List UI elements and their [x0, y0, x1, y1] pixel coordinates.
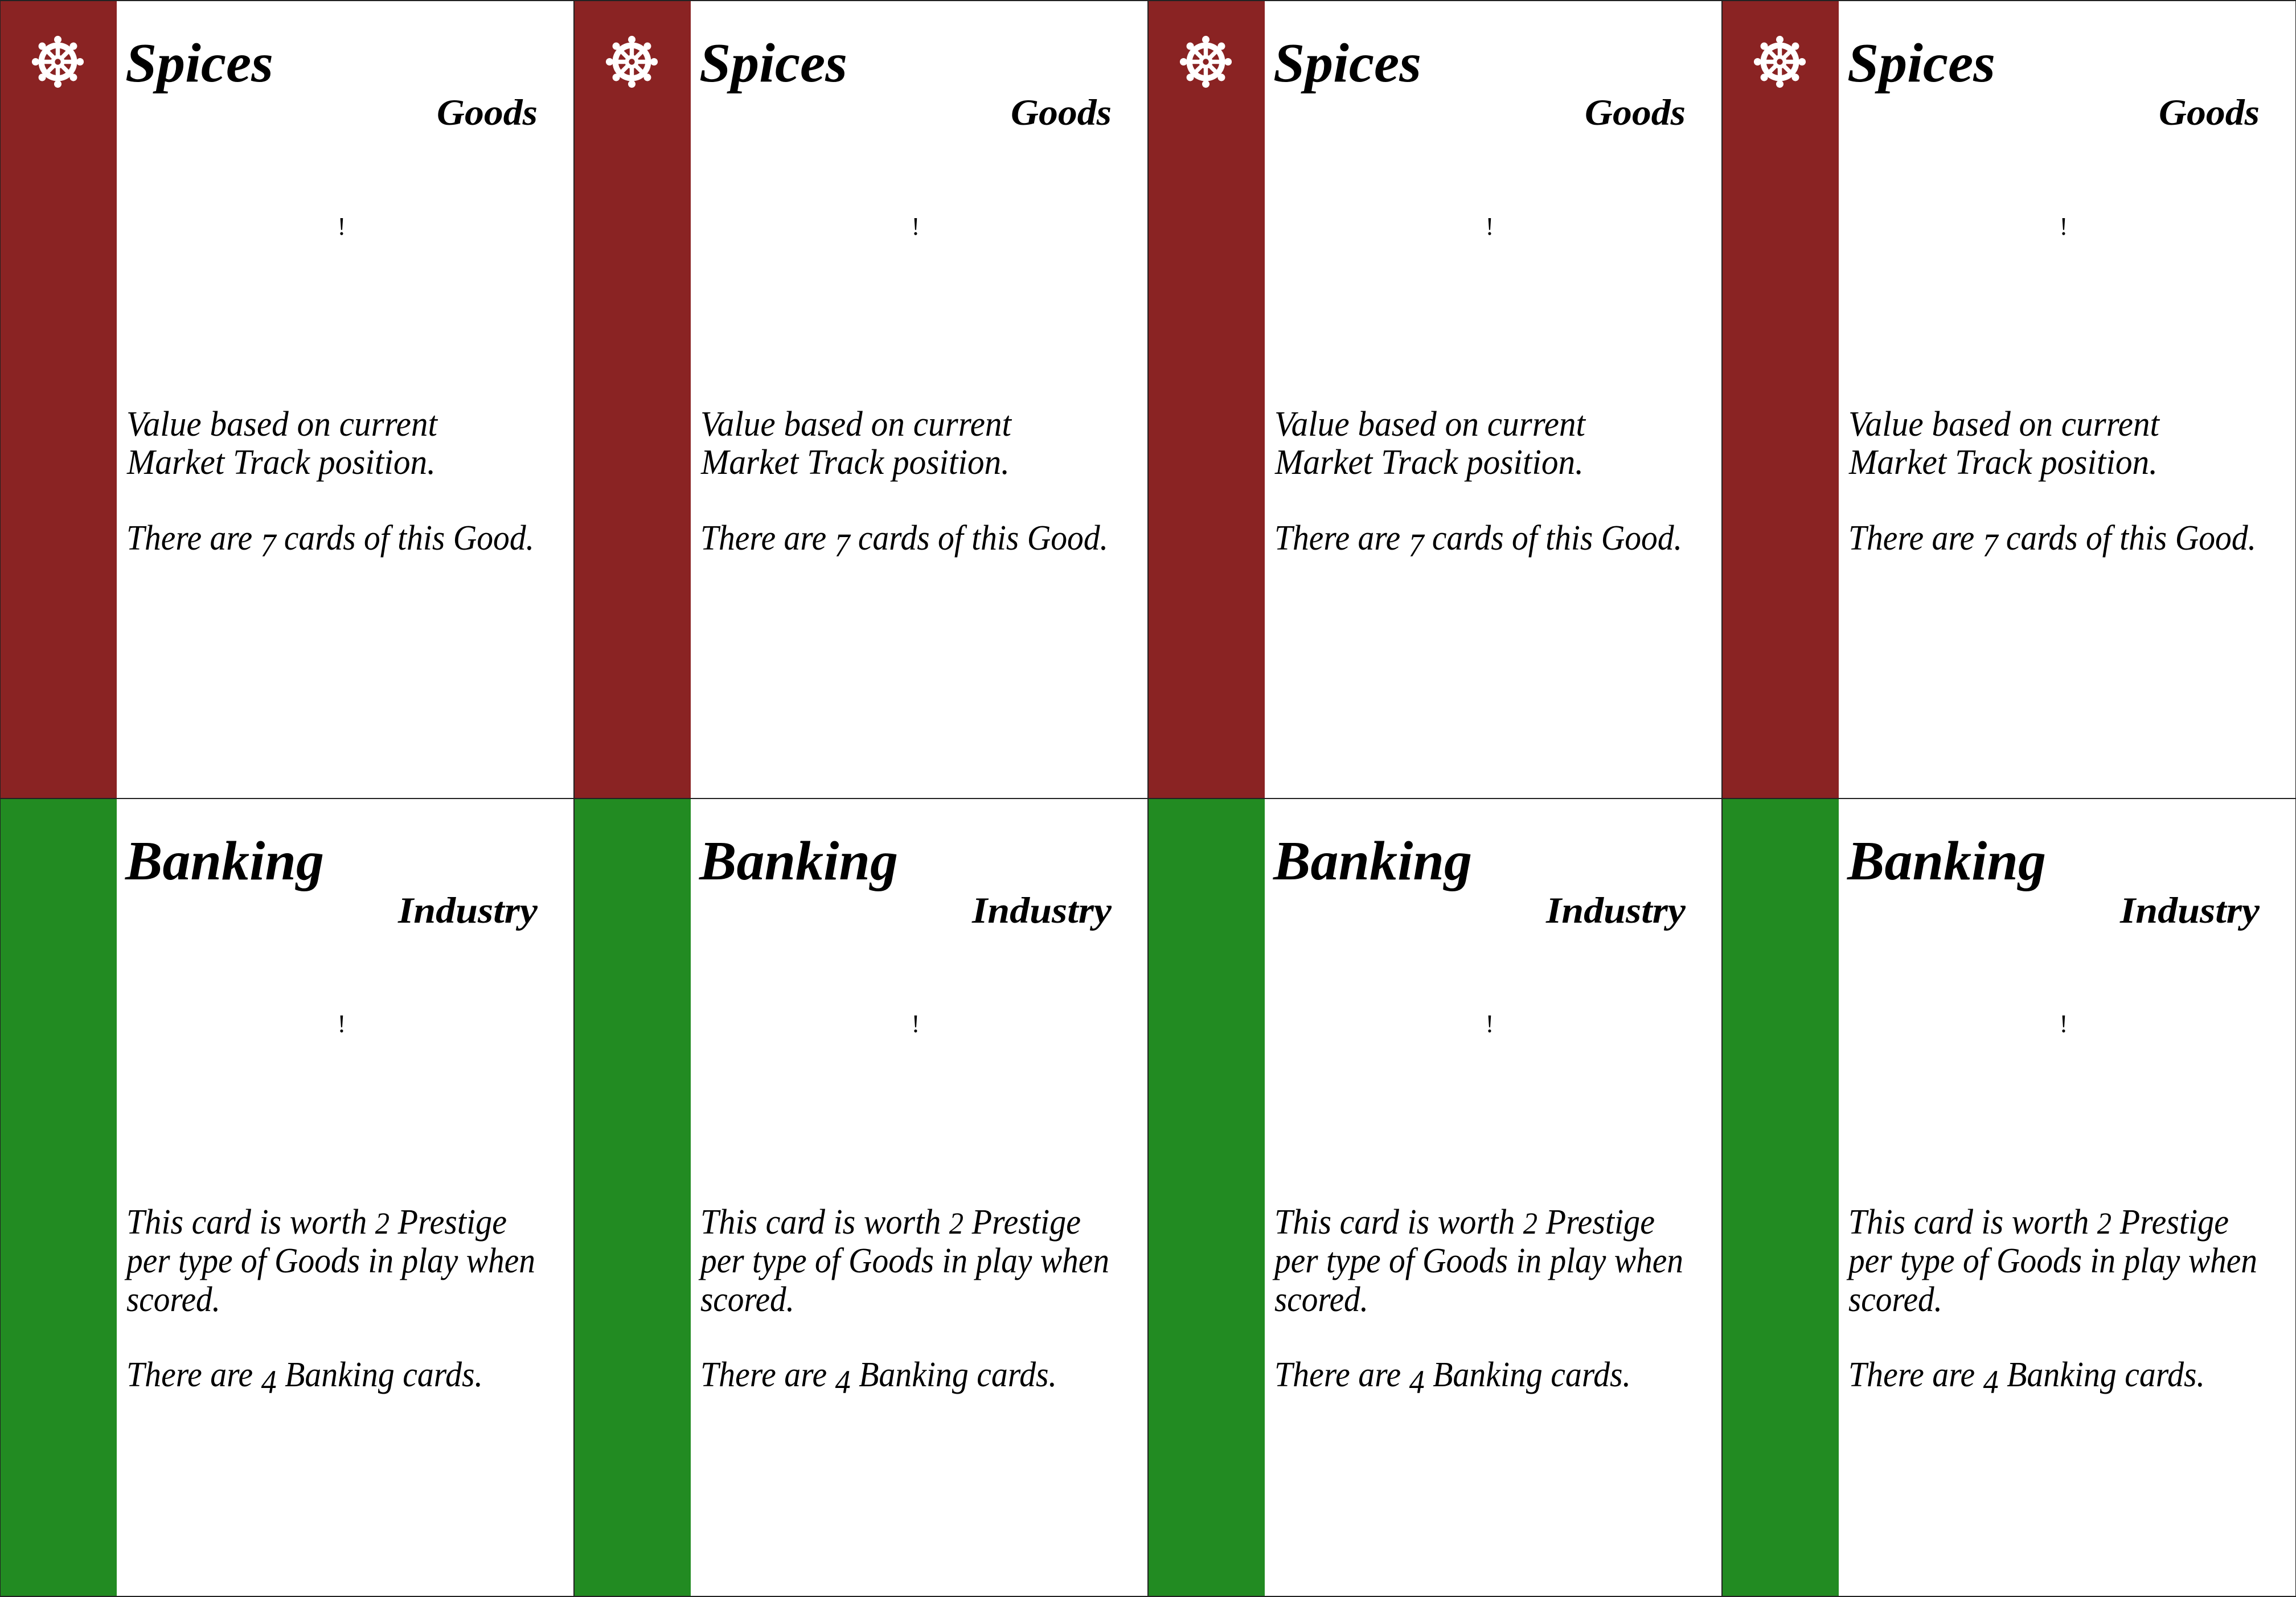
card text — [124, 1203, 535, 1401]
card text: There are — [126, 519, 262, 558]
card text: Value based on current — [1848, 405, 2160, 444]
card text: per type of Goods in play when — [698, 1242, 1109, 1280]
card text: 4 — [1409, 1363, 1425, 1401]
card text: This card is worth 2 Prestige — [1848, 1203, 2229, 1242]
card text: This card is worth 2 Prestige — [126, 1203, 507, 1242]
exclamation mark: ! — [2060, 212, 2068, 240]
card text — [126, 405, 534, 564]
exclamation mark: ! — [338, 1010, 346, 1038]
colour strip — [1148, 798, 1265, 1597]
card text: There are — [1274, 519, 1410, 558]
card: Spices 4 — [1722, 0, 2296, 798]
card text — [1848, 405, 2256, 564]
card: Banking 2 — [574, 798, 1148, 1597]
card text: per type of Goods in play when — [1272, 1242, 1683, 1280]
card text — [1274, 405, 1682, 564]
card text — [700, 405, 1108, 564]
category: Goods — [437, 92, 538, 133]
card border — [1148, 1, 1722, 798]
card text — [1272, 1203, 1683, 1401]
title: Banking — [125, 830, 324, 891]
card border — [574, 1, 1148, 798]
card text: There are — [700, 519, 836, 558]
card text: Market Track position. — [700, 443, 1010, 482]
card text: There are — [1274, 1356, 1410, 1394]
card text: scored. — [126, 1280, 220, 1319]
card text: 4 — [835, 1363, 851, 1401]
card text: Banking cards. — [1999, 1356, 2205, 1394]
card: Spices 2 — [574, 0, 1148, 798]
icon: ship wheel — [1754, 36, 1806, 88]
category: Industry — [397, 890, 538, 931]
card text: 7 — [1409, 527, 1425, 564]
card text: scored. — [1274, 1280, 1368, 1319]
card text: This card is worth 2 Prestige — [700, 1203, 1081, 1242]
card text — [1846, 1203, 2257, 1401]
category: Goods — [1585, 92, 1686, 133]
card border — [1722, 798, 2296, 1596]
exclamation mark: ! — [1486, 1010, 1494, 1038]
category: Industry — [2119, 890, 2260, 931]
card text: cards of this Good. — [1998, 519, 2256, 558]
title: Banking — [1847, 830, 2046, 891]
exclamation mark: ! — [2060, 1010, 2068, 1038]
card text: Market Track position. — [1848, 443, 2158, 482]
card: Banking 4 — [1722, 798, 2296, 1597]
card border — [0, 1, 574, 798]
card text: 4 — [1983, 1363, 1999, 1401]
category: Goods — [1011, 92, 1112, 133]
card border — [1722, 1, 2296, 798]
category: Goods — [2159, 92, 2260, 133]
icon: ship wheel — [606, 36, 658, 88]
card text: There are — [1848, 519, 1984, 558]
card text: Market Track position. — [126, 443, 436, 482]
icon: ship wheel — [32, 36, 84, 88]
card text: cards of this Good. — [1424, 519, 1682, 558]
colour strip — [1722, 0, 1839, 798]
colour strip — [0, 798, 117, 1597]
title: Spices — [125, 32, 273, 93]
exclamation mark: ! — [338, 212, 346, 240]
card text: cards of this Good. — [276, 519, 534, 558]
card text: per type of Goods in play when — [124, 1242, 535, 1280]
card text: Value based on current — [1274, 405, 1586, 444]
card text: Value based on current — [700, 405, 1012, 444]
card: Banking 1 — [0, 798, 574, 1597]
title: Spices — [1273, 32, 1421, 93]
card border — [574, 798, 1148, 1596]
card text: Market Track position. — [1274, 443, 1584, 482]
card text: 7 — [835, 527, 851, 564]
exclamation mark: ! — [912, 1010, 920, 1038]
colour strip — [574, 798, 691, 1597]
card text: Banking cards. — [277, 1356, 483, 1394]
card text: Banking cards. — [851, 1356, 1057, 1394]
colour strip — [1148, 0, 1265, 798]
title: Spices — [699, 32, 847, 93]
title: Banking — [699, 830, 898, 891]
card border — [1148, 798, 1722, 1596]
colour strip — [574, 0, 691, 798]
card text — [698, 1203, 1109, 1401]
card: Banking 3 — [1148, 798, 1722, 1597]
card text: There are — [700, 1356, 836, 1394]
card: Spices 1 — [0, 0, 574, 798]
card text: This card is worth 2 Prestige — [1274, 1203, 1655, 1242]
card text: Banking cards. — [1425, 1356, 1631, 1394]
card text: Value based on current — [126, 405, 438, 444]
card text: 7 — [261, 527, 277, 564]
category: Industry — [971, 890, 1112, 931]
category: Industry — [1545, 890, 1686, 931]
icon: ship wheel — [1180, 36, 1232, 88]
exclamation mark: ! — [1486, 212, 1494, 240]
title: Spices — [1847, 32, 1995, 93]
card text: per type of Goods in play when — [1846, 1242, 2257, 1280]
card text: There are — [126, 1356, 262, 1394]
exclamation mark: ! — [912, 212, 920, 240]
card text: 4 — [261, 1363, 277, 1401]
card text: cards of this Good. — [850, 519, 1108, 558]
colour strip — [0, 0, 117, 798]
card border — [0, 798, 574, 1596]
card text: scored. — [1848, 1280, 1942, 1319]
card text: scored. — [700, 1280, 794, 1319]
card text: 7 — [1983, 527, 1999, 564]
card text: There are — [1848, 1356, 1984, 1394]
card: Spices 3 — [1148, 0, 1722, 798]
colour strip — [1722, 798, 1839, 1597]
title: Banking — [1273, 830, 1472, 891]
